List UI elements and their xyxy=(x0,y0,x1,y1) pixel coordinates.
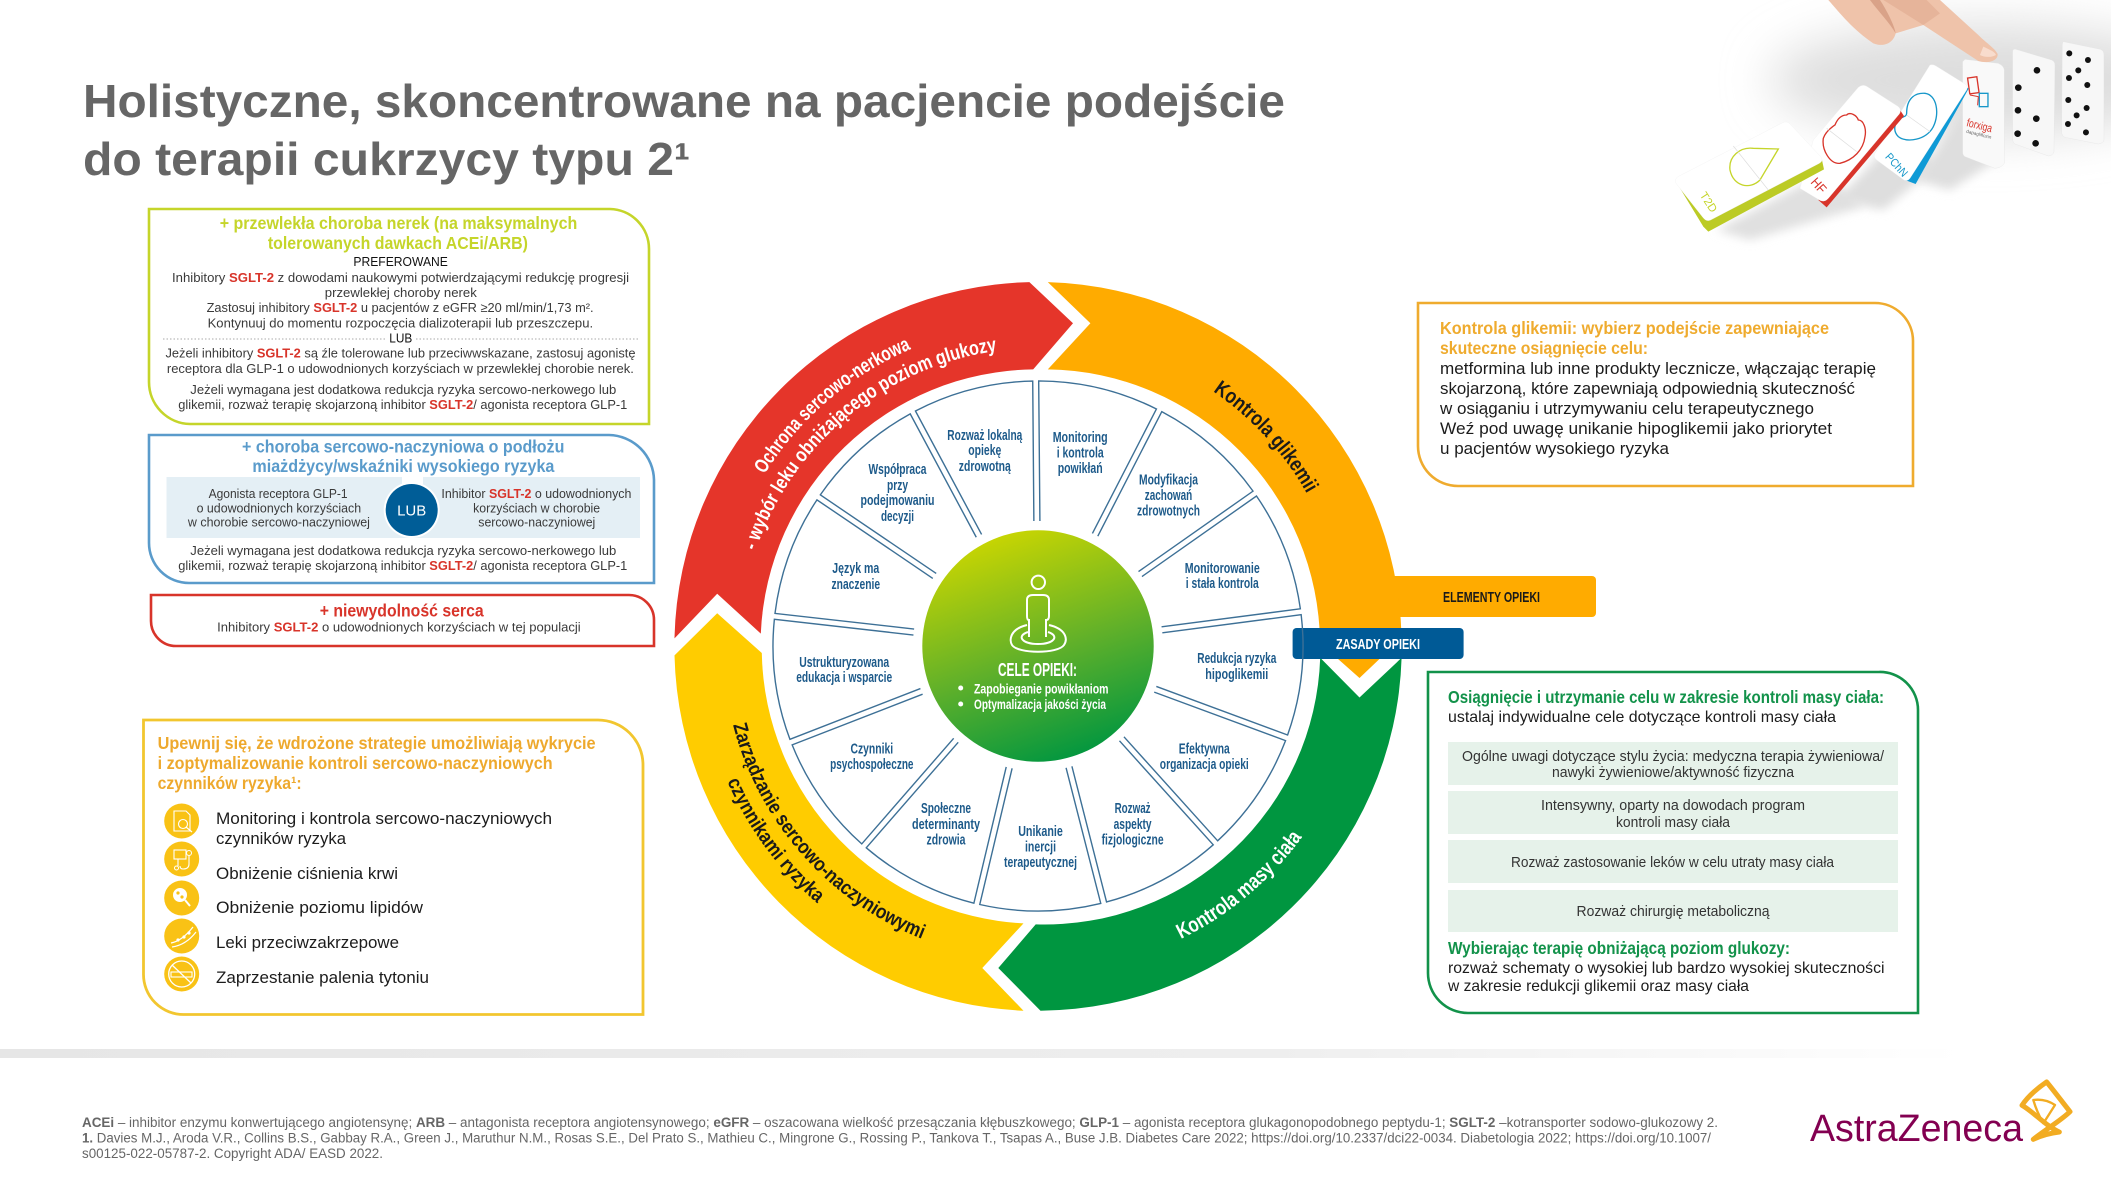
heading: risk factors xyxy=(158,733,596,793)
text block: preferred therapy: PREFEROWANE xyxy=(353,254,448,269)
badge: LUB: LUB xyxy=(397,502,426,520)
wheel cell outlines xyxy=(747,356,1324,933)
list: goals: Zapobieganie powikłaniom xyxy=(974,680,1108,696)
footer references xyxy=(82,1115,1718,1161)
wheel cell labels: Monitoring xyxy=(1053,430,1108,446)
list: risk factor actions: Zaprzestanie palenia tytoniu xyxy=(216,968,429,987)
wheel cell labels: terapeutycznej xyxy=(1004,855,1077,871)
option: surgery: Rozważ chirurgię metaboliczną xyxy=(1576,903,1770,920)
ring arrow: cardiorenal protection: Ochrona sercowo-nerkowa xyxy=(755,340,912,472)
wheel cell labels: decyzji xyxy=(881,509,914,525)
wheel cell labels: Modyfikacja xyxy=(1139,472,1199,488)
band: therapy options: sercowo-naczyniowej xyxy=(478,515,595,530)
list: risk factor actions: czynników ryzyka xyxy=(216,829,347,848)
ring arrow: glycaemic control: Kontrola glikemii xyxy=(1214,380,1320,493)
wheel cell labels: edukacja i wsparcie xyxy=(796,670,892,686)
band: therapy options: Agonista receptora GLP-1 xyxy=(209,486,348,501)
footer references: 1. Davies M.J., Aroda V.R., Collins B.S., Gabbay R.A., Green J., Maruthur N.M., Rosas S.E., Del Prato S., Mathieu C., Mingrone G., Rossing P., Tankova T., Tsapas A., Buse J.B. Diabetes Care 2022; https://doi.org/10.2337/dci22-0034. Diabetologia 2022; https://doi.org/10.1007/ xyxy=(82,1130,1711,1146)
label bar: principles of care: ZASADY OPIEKI xyxy=(1336,637,1420,653)
panel: heart failure xyxy=(151,595,654,646)
text: weight goal: ustalaj indywidualne cele dotyczące kontroli masy ciała xyxy=(1448,709,1836,726)
wheel cell labels: fizjologiczne xyxy=(1102,832,1164,848)
label bar: elements of care xyxy=(1380,576,1596,617)
wheel cell labels: Współpraca xyxy=(868,462,927,478)
option: lifestyle: Ogólne uwagi dotyczące stylu życia: medyczna terapia żywieniowa/ xyxy=(1462,748,1885,765)
ring arrow: glycaemic control xyxy=(1048,282,1402,678)
wheel cell labels: Efektywna xyxy=(1179,742,1230,758)
text block: glycaemic guidance: u pacjentów wysokiego ryzyka xyxy=(1440,439,1670,458)
panel: cardiovascular risk factors xyxy=(143,720,643,1015)
panel: chronic kidney disease xyxy=(149,209,649,424)
text block: alternative therapy: LUB xyxy=(389,331,412,346)
centre circle: goals of care: CELE OPIEKI: xyxy=(998,660,1077,680)
icon: monitoring xyxy=(164,804,199,838)
ring arrow: weight management: Kontrola masy ciała xyxy=(1175,832,1302,938)
text block: alternative therapy: Jeżeli inhibitory SGLT-2 są źle tolerowane lub przeciwwskazane, zastosuj agonistę xyxy=(166,346,636,361)
wheel cell labels: zdrowotną xyxy=(959,459,1011,475)
panel: cardiovascular disease xyxy=(149,435,654,583)
domino: six xyxy=(2062,42,2104,144)
wheel cell labels: Rozważ lokalną xyxy=(947,428,1023,444)
heading: kidney disease: tolerowanych dawkach ACEi/ARB) xyxy=(268,233,528,253)
text block: alternative therapy xyxy=(166,331,636,412)
domino: PChN: PChN xyxy=(1882,151,1910,180)
text block: alternative therapy: glikemii, rozważ terapię skojarzoną inhibitor SGLT-2/ agonista receptora GLP-1 xyxy=(178,397,627,412)
domino: five xyxy=(2013,49,2055,156)
text block: combination therapy xyxy=(178,543,627,573)
text: glucose-lowering guidance: w zakresie redukcji glikemii oraz masy ciała xyxy=(1447,978,1749,995)
list: goals: Optymalizacja jakości życia xyxy=(974,696,1106,712)
heading: kidney disease: + przewlekła choroba nerek (na maksymalnych xyxy=(220,213,577,233)
band: therapy options xyxy=(166,476,640,538)
title: Holistyczne, skoncentrowane na pacjencie podejście xyxy=(83,75,1285,127)
hand xyxy=(1828,0,1998,62)
label bar: elements of care: ELEMENTY OPIEKI xyxy=(1443,589,1540,606)
heading: glycaemic control: skuteczne osiągnięcie celu: xyxy=(1440,338,1648,358)
text block: alternative therapy: Jeżeli wymagana jest dodatkowa redukcja ryzyka sercowo-nerkowego lub xyxy=(190,382,616,397)
option: surgery xyxy=(1448,890,1898,932)
option: intensive programme xyxy=(1448,791,1898,834)
wheel cell labels: hipoglikemii xyxy=(1205,667,1268,683)
heading: weight goal: Osiągnięcie i utrzymanie celu w zakresie kontroli masy ciała: xyxy=(1448,687,1884,707)
text block: glycaemic guidance: metformina lub inne produkty lecznicze, włączając terapię xyxy=(1440,359,1876,378)
title xyxy=(83,75,1285,185)
option: intensive programme: kontroli masy ciała xyxy=(1616,814,1731,831)
wheel cell labels: i kontrola xyxy=(1057,446,1104,462)
option: medication xyxy=(1448,840,1898,883)
band: therapy options: o udowodnionych korzyściach xyxy=(197,501,361,516)
domino: forxiga xyxy=(1963,59,2004,168)
option: lifestyle xyxy=(1448,742,1898,785)
text block: alternative therapy: receptora dla GLP-1 o udowodnionych korzyściach w przewlekłej chorobie nerek. xyxy=(167,361,634,376)
wheel cell labels: Czynniki xyxy=(850,742,893,758)
text: glucose-lowering guidance: rozważ schematy o wysokiej lub bardzo wysokiej skuteczności xyxy=(1448,960,1884,977)
text block: preferred therapy: Inhibitory SGLT-2 z dowodami naukowymi potwierdzającymi redukcję progresji xyxy=(172,270,629,285)
wheel cell labels: aspekty xyxy=(1114,817,1152,833)
heading: glycaemic control xyxy=(1440,318,1829,358)
text: glucose-lowering guidance xyxy=(1447,960,1884,995)
icon: anticoagulants xyxy=(164,918,199,954)
wheel cell labels xyxy=(796,428,1277,871)
wheel cell labels: determinanty xyxy=(912,817,980,833)
label bar: principles of care xyxy=(1293,628,1464,659)
wheel cell labels: Unikanie xyxy=(1018,824,1063,840)
wheel cell labels: psychospołeczne xyxy=(830,757,914,773)
heading: risk factors: Upewnij się, że wdrożone strategie umożliwiają wykrycie xyxy=(158,733,596,753)
text block: preferred therapy xyxy=(172,254,629,331)
ring arrow: cardiovascular risk management: czynnikami ryzyka xyxy=(728,779,822,904)
band: therapy options: w chorobie sercowo-naczyniowej xyxy=(187,515,370,530)
option: medication: Rozważ zastosowanie leków w celu utraty masy ciała xyxy=(1511,854,1835,871)
wheel cell labels: opiekę xyxy=(968,443,1001,459)
wheel cell labels: przy xyxy=(887,478,908,494)
icon: blood pressure xyxy=(164,842,199,876)
wheel cell labels: Monitorowanie xyxy=(1185,561,1260,577)
icon: lipids xyxy=(164,880,199,916)
band: therapy options: korzyściach w chorobie xyxy=(473,501,600,516)
chart: care wheel xyxy=(674,282,1596,1011)
list: risk factor actions: Leki przeciwzakrzepowe xyxy=(216,933,399,952)
heading: glucose-lowering therapy: Wybierając terapię obniżającą poziom glukozy: xyxy=(1448,938,1790,958)
panel: weight management xyxy=(1428,672,1918,1013)
centre circle: goals of care xyxy=(922,530,1154,762)
wheel cell labels: inercji xyxy=(1025,840,1056,856)
domino: HF xyxy=(1800,85,1904,207)
domino: HF: HF xyxy=(1808,175,1830,197)
footer references: s00125-022-05787-2. Copyright ADA/ EASD 2022. xyxy=(82,1146,383,1161)
illustration: hand toppling dominoes xyxy=(1675,0,2111,240)
panel: glycaemic control xyxy=(1418,303,1913,486)
ring arrow: cardiorenal protection: - wybór leku obniżającego poziom glukozy xyxy=(749,340,996,549)
text block: preferred therapy: Zastosuj inhibitory SGLT-2 u pacjentów z eGFR ≥20 ml/min/1,73 m². xyxy=(207,300,594,315)
heading: kidney disease xyxy=(220,213,577,253)
title: do terapii cukrzycy typu 2¹ xyxy=(83,133,690,185)
heading: risk factors: czynników ryzyka¹: xyxy=(158,773,302,793)
domino: T2D: T2D xyxy=(1697,190,1719,215)
wheel cell labels: i stała kontrola xyxy=(1186,576,1259,592)
wheel cell labels: Społeczne xyxy=(921,801,971,817)
text block: preferred therapy: Kontynuuj do momentu rozpoczęcia dializoterapii lub przeszczepu. xyxy=(208,316,593,331)
list: risk factor actions: Obniżenie poziomu lipidów xyxy=(216,898,424,917)
ring arrow: cardiovascular risk management: Zarządzanie sercowo-naczyniowymi xyxy=(733,722,926,938)
wheel cell labels: zachowań xyxy=(1145,488,1192,504)
wheel cell labels: Język ma xyxy=(832,561,880,577)
list: goals xyxy=(958,680,1108,712)
wheel cell labels: Redukcja ryzyka xyxy=(1197,651,1277,667)
logo: AstraZeneca: AstraZeneca xyxy=(1810,1108,2024,1150)
list: risk factor actions: Obniżenie ciśnienia krwi xyxy=(216,864,398,883)
heading: cardiovascular disease: + choroba sercowo-naczyniowa o podłożu xyxy=(242,436,564,456)
text block: preferred therapy: przewlekłej choroby nerek xyxy=(325,285,477,300)
domino: forxiga: dapagliflozin xyxy=(1966,129,1992,140)
icon: patient xyxy=(1011,576,1066,652)
heading: risk factors: i zoptymalizowanie kontroli sercowo-naczyniowych xyxy=(158,753,553,773)
icon: gold helix xyxy=(2022,1082,2070,1139)
option: lifestyle: nawyki żywieniowe/aktywność fizyczna xyxy=(1552,764,1795,781)
icon: no smoking xyxy=(164,956,199,992)
badge: LUB xyxy=(384,482,440,538)
ring arrow: cardiovascular risk management xyxy=(674,613,1024,1011)
option: intensive programme: Intensywny, oparty na dowodach program xyxy=(1541,797,1805,814)
text block: combination therapy: Jeżeli wymagana jest dodatkowa redukcja ryzyka sercowo-nerkowego lub xyxy=(190,543,616,558)
wheel cell labels: Ustrukturyzowana xyxy=(799,655,890,671)
heading: cardiovascular disease: miażdżycy/wskaźniki wysokiego ryzyka xyxy=(252,456,555,476)
wheel cell labels: organizacja opieki xyxy=(1160,757,1249,773)
wheel cell labels: zdrowotnych xyxy=(1137,504,1200,520)
domino: PChN xyxy=(1874,65,1969,184)
domino: forxiga: forxiga xyxy=(1965,117,1994,135)
text block: combination therapy: glikemii, rozważ terapię skojarzoną inhibitor SGLT-2/ agonista receptora GLP-1 xyxy=(178,558,627,573)
text block: glycaemic guidance: Weź pod uwagę unikanie hipoglikemii jako priorytet xyxy=(1440,419,1832,438)
ring arrow: cardiorenal protection xyxy=(674,282,1073,638)
text block: glycaemic guidance: w osiąganiu i utrzymywaniu celu terapeutycznego xyxy=(1439,399,1814,418)
heading: heart failure: + niewydolność serca xyxy=(320,601,484,621)
list: risk factor actions: Monitoring i kontrola sercowo-naczyniowych xyxy=(216,809,552,828)
wheel cell labels: powikłań xyxy=(1058,461,1103,477)
ring arrow: weight management xyxy=(998,659,1402,1011)
band: therapy options: Inhibitor SGLT-2 o udowodnionych xyxy=(441,486,631,501)
footer references: ACEi – inhibitor enzymu konwertującego angiotensynę; ARB – antagonista receptora angiotensynowego; eGFR – oszacowana wielkość przesączania kłębuszkowego; GLP-1 – agonista receptora glukagonopodobnego peptydu-1; SGLT-2 –kotransporter sodowo-glukozowy 2. xyxy=(82,1115,1718,1130)
text: heart failure therapy: Inhibitory SGLT-2 o udowodnionych korzyściach w tej populacji xyxy=(217,620,581,635)
heading: glycaemic control: Kontrola glikemii: wybierz podejście zapewniające xyxy=(1440,318,1829,338)
wheel cell labels: Rozważ xyxy=(1115,801,1151,817)
logo: AstraZeneca xyxy=(1810,1082,2070,1150)
wheel cell labels: zdrowia xyxy=(926,832,966,848)
heading: cardiovascular disease xyxy=(242,436,564,476)
text block: glycaemic guidance xyxy=(1439,359,1876,458)
wheel cell labels: podejmowaniu xyxy=(860,493,934,509)
wheel cell labels: znaczenie xyxy=(832,577,880,593)
domino: T2D xyxy=(1675,122,1824,232)
list: risk factor actions xyxy=(216,809,552,987)
text block: glycaemic guidance: skojarzoną, które zapewniają odpowiednią skuteczność xyxy=(1440,379,1855,398)
